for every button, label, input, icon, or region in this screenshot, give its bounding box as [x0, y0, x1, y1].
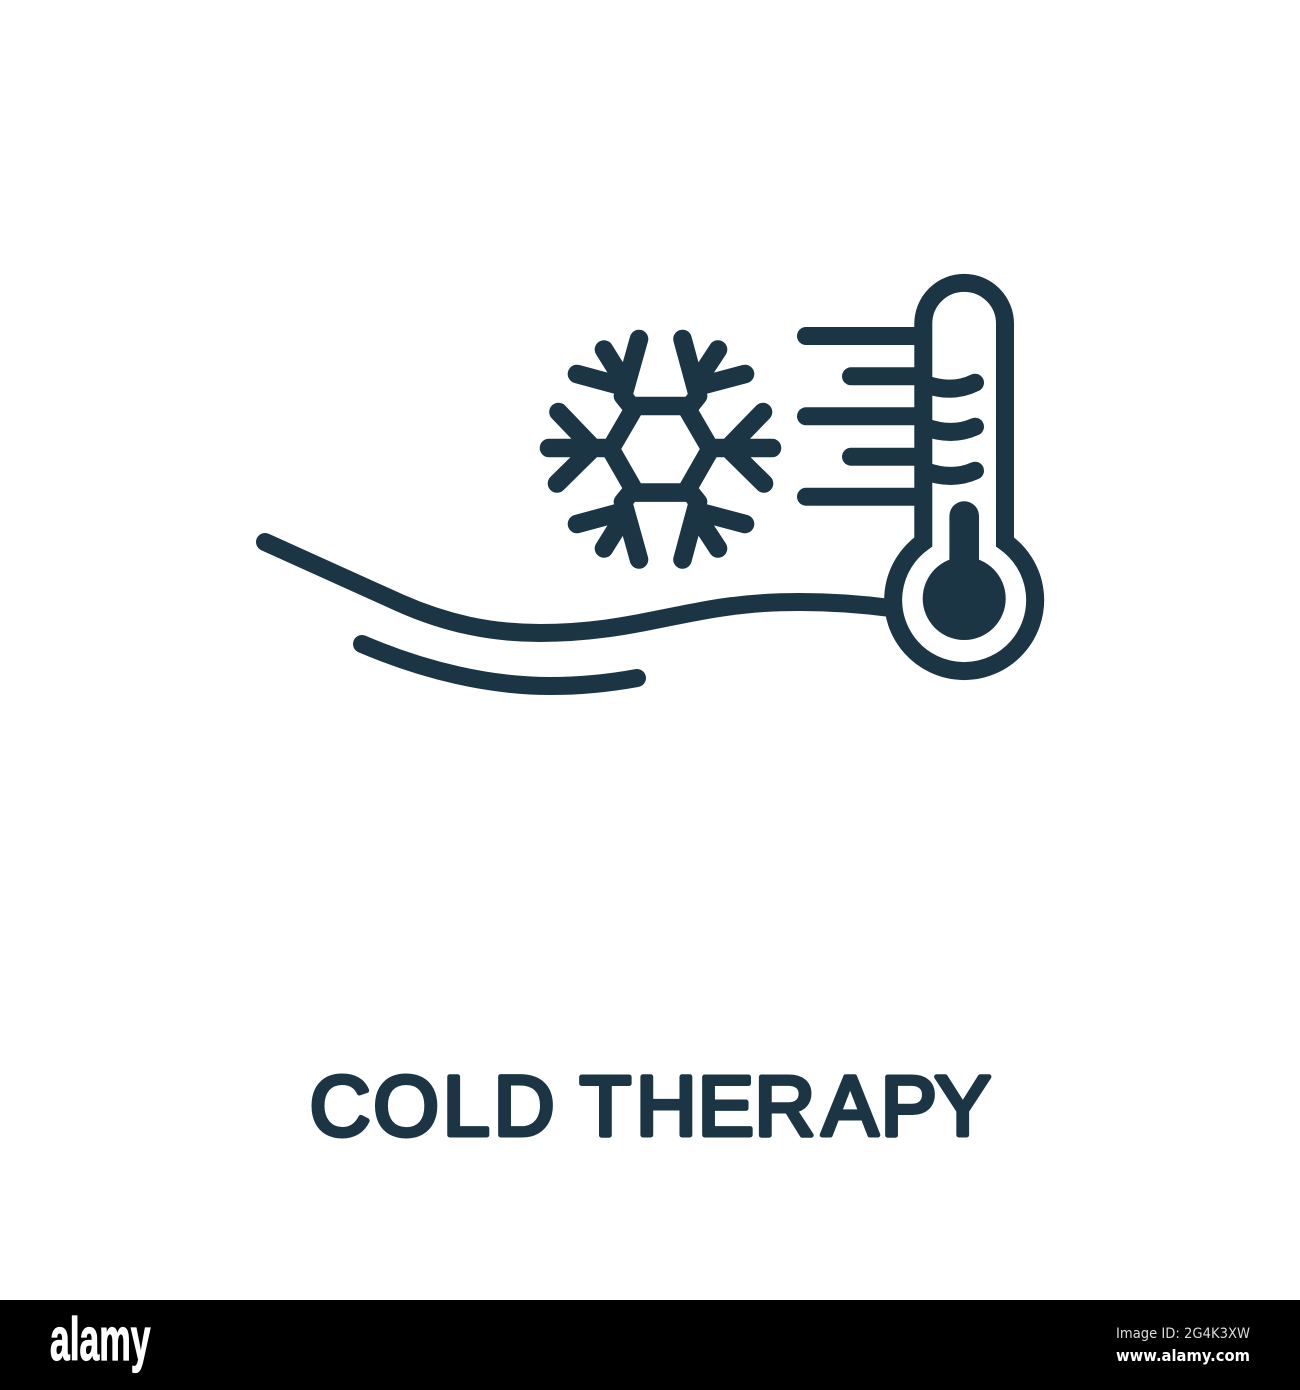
website: www.alamy.com — [1116, 1346, 1250, 1365]
icon: snowflake — [549, 339, 772, 560]
icon: cold therapy — [265, 283, 1035, 686]
logo: alamy: alamy — [50, 1306, 151, 1373]
icon: skin surface — [265, 542, 890, 686]
footer bar — [0, 1300, 1300, 1390]
title: COLD THERAPY — [310, 1059, 991, 1153]
icon: cold air lines — [806, 336, 975, 497]
image id: Image ID: 2G4K3XW — [1116, 1326, 1250, 1342]
icon: thermometer — [893, 283, 1035, 671]
